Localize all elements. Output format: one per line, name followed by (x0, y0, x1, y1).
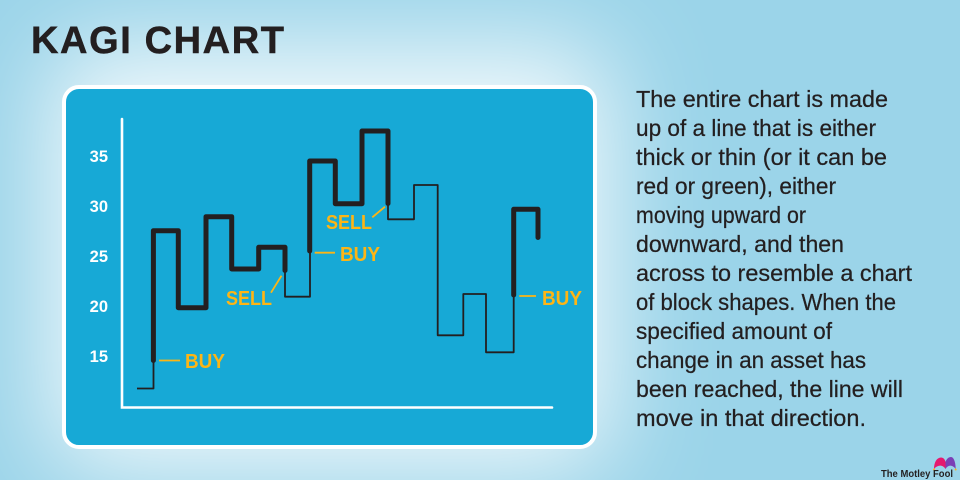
title: KAGI CHART (31, 20, 284, 62)
y-axis labels: 25 (90, 248, 108, 266)
y-axis labels: 30 (90, 198, 108, 216)
buy and sell callouts: BUY (542, 287, 582, 310)
description text: red or green), either (636, 173, 836, 199)
thick line segments (153, 131, 538, 360)
buy and sell callouts (159, 207, 582, 373)
y-axis labels: 20 (90, 298, 108, 316)
buy and sell callouts: SELL (326, 211, 372, 234)
description text (636, 86, 913, 431)
thin line segments (137, 185, 514, 388)
chart axes (122, 119, 552, 408)
logo: The Motley Fool (881, 457, 957, 480)
description text: The entire chart is made (636, 86, 888, 112)
buy and sell callouts: BUY (340, 243, 380, 266)
buy and sell callouts: BUY (185, 350, 225, 373)
y-axis labels: 15 (90, 348, 108, 366)
description text: across to resemble a chart (636, 260, 913, 286)
description text: change in an asset has (636, 347, 866, 373)
panel: kagi chart (64, 87, 595, 447)
description text: been reached, the line will (636, 376, 903, 402)
description text: moving upward or (636, 202, 806, 228)
icon: jester hat (933, 457, 957, 470)
description text: move in that direction. (636, 405, 866, 431)
description text: of block shapes. When the (636, 289, 896, 315)
description text: up of a line that is either (636, 115, 876, 141)
logo: The Motley Fool: The Motley Fool (881, 468, 953, 480)
y-axis labels: 35 (90, 148, 108, 166)
description text: downward, and then (636, 231, 844, 257)
buy and sell callouts: SELL (226, 287, 272, 310)
description text: thick or thin (or it can be (636, 144, 887, 170)
description text: specified amount of (636, 318, 833, 344)
y-axis labels (90, 148, 108, 366)
